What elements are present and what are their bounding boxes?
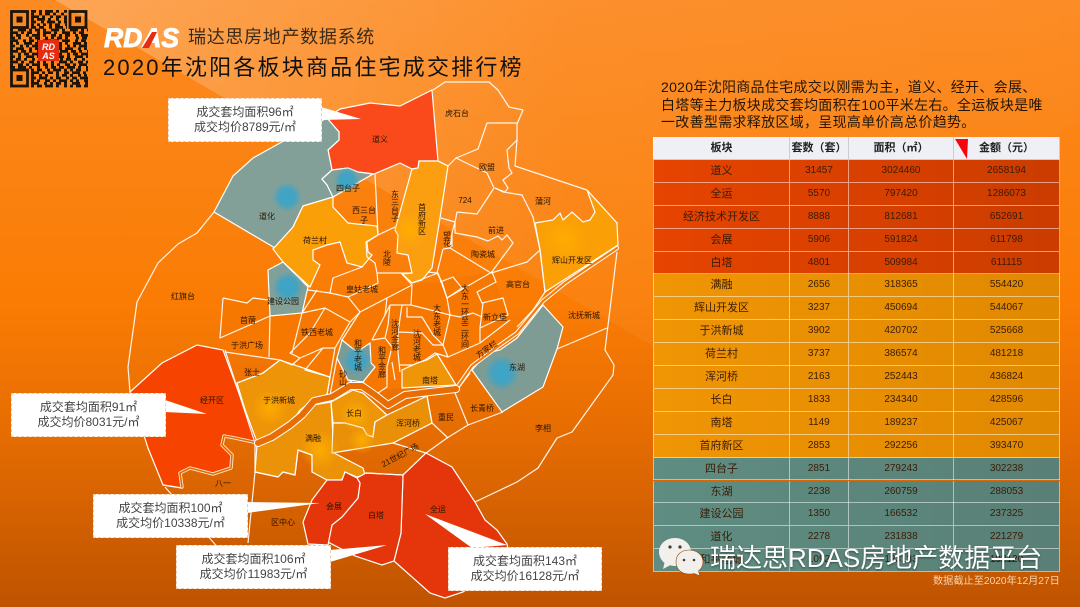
row: 满融 <box>653 274 1060 297</box>
map labels: 建设公园 <box>267 296 299 306</box>
row: 道化 <box>653 526 1060 549</box>
map labels: 南塔 <box>422 375 438 385</box>
map labels: 经开区 <box>200 395 224 405</box>
river <box>180 248 617 487</box>
map labels: 沈河金廊 <box>390 318 400 352</box>
map labels: 道义 <box>372 134 388 144</box>
row: 会展 <box>653 229 1060 252</box>
row: 满融: 满融 <box>710 279 732 291</box>
map labels: 和平金廊 <box>378 346 386 379</box>
callout: 道义 <box>168 98 322 142</box>
row: 建设公园: 166532 <box>884 508 918 519</box>
callout: 白塔: 成交均价11983元/㎡ <box>200 567 307 581</box>
row: 道义: 3024460 <box>882 165 920 176</box>
region: 长白 <box>331 390 387 437</box>
row: 和平老城: 1092 <box>808 554 830 565</box>
row: 道化: 221279 <box>990 531 1023 542</box>
map labels: 沈抚新城 <box>568 310 600 320</box>
row: 荷兰村: 荷兰村 <box>705 348 738 360</box>
map labels: 四台子 <box>336 183 360 193</box>
callout: 白塔: 成交套均面积106㎡ <box>201 552 306 566</box>
row: 于洪新城 <box>653 320 1060 343</box>
map labels: 砂山 <box>338 369 348 387</box>
intro text <box>661 79 1043 130</box>
map labels: 全运 <box>430 504 446 514</box>
map labels: 和平老城 <box>354 339 362 372</box>
sort marker triangle <box>955 139 968 159</box>
table header: 套数（套） <box>792 142 846 154</box>
region: 辉山开发区 <box>535 190 618 292</box>
callout: 全运 <box>448 547 602 591</box>
ranking table <box>653 137 1060 572</box>
subtitle: 瑞达思房地产数据系统 <box>188 27 375 47</box>
row: 东湖: 东湖 <box>710 486 732 498</box>
row: 东湖: 2238 <box>808 486 830 496</box>
row: 长白 <box>653 389 1060 412</box>
region: 首府新区 <box>395 161 448 283</box>
row: 浑河桥: 252443 <box>884 371 918 382</box>
map labels: 长青桥 <box>470 403 494 413</box>
row: 南塔: 189237 <box>884 417 918 428</box>
row: 和平老城 <box>653 549 1060 572</box>
table header: 面积（㎡） <box>874 142 928 154</box>
row: 于洪新城: 420702 <box>884 325 918 336</box>
row: 浑河桥 <box>653 366 1060 389</box>
map labels: 欧盟 <box>479 162 495 172</box>
row: 经济技术开发区: 652691 <box>990 211 1023 222</box>
row: 会展: 611798 <box>990 234 1023 245</box>
row: 东湖: 288053 <box>990 486 1023 496</box>
map labels: 长白 <box>346 408 362 418</box>
region: 会展 <box>303 472 360 545</box>
region: 建设公园 <box>268 262 308 316</box>
row: 会展: 591824 <box>884 234 918 245</box>
data date note: 数据截止至2020年12月27日 <box>933 576 1060 587</box>
map labels: 道化 <box>259 211 275 221</box>
map glows <box>252 167 587 470</box>
map labels: 西三台 <box>352 205 376 215</box>
row: 道化: 2278 <box>808 531 830 542</box>
intro text: 2020年沈阳商品住宅成交以刚需为主，道义、经开、会展、 <box>661 79 1037 95</box>
map labels: 苜蓿 <box>240 315 256 325</box>
map labels: 铁西老城 <box>301 327 333 337</box>
row: 长白: 1833 <box>808 394 830 405</box>
map labels: 望花 <box>442 230 452 248</box>
map labels <box>171 108 600 527</box>
row: 白塔: 611115 <box>991 257 1022 268</box>
callout: 经开区: 成交套均面积91㎡ <box>40 400 137 414</box>
row: 满融: 554420 <box>990 279 1023 290</box>
map labels: 方家栏 <box>474 338 499 360</box>
table header <box>653 137 1060 160</box>
row: 首府新区: 292256 <box>884 440 918 451</box>
row: 南塔: 425067 <box>990 417 1023 428</box>
map labels: 李相 <box>535 423 551 433</box>
region: 道义 <box>327 90 438 174</box>
row: 经济技术开发区 <box>653 206 1060 229</box>
row: 和平老城: 123133 <box>884 554 918 565</box>
region: 荷兰村 <box>273 197 378 287</box>
region: 白塔 <box>328 473 403 565</box>
QR code <box>10 10 88 88</box>
row: 建设公园: 237325 <box>990 508 1023 519</box>
intro text: 白塔等主力板块成交套均面积在100平米左右。全运板块是唯 <box>661 97 1043 113</box>
row: 四台子: 四台子 <box>705 463 738 475</box>
row: 白塔: 509984 <box>884 257 918 268</box>
row: 白塔 <box>653 252 1060 274</box>
map labels: 东三台子 <box>390 189 400 222</box>
callout: 经开区 <box>11 393 166 437</box>
row: 全运: 1286073 <box>987 188 1026 199</box>
row: 南塔 <box>653 412 1060 435</box>
row: 经济技术开发区: 8888 <box>808 211 830 222</box>
map labels: 白塔 <box>368 510 384 520</box>
row: 于洪新城: 于洪新城 <box>700 325 744 337</box>
intro text: 一改善型需求释放区域，呈现高单价高总价趋势。 <box>661 114 976 130</box>
row: 道义 <box>653 160 1060 183</box>
callout: 经开区: 成交均价8031元/㎡ <box>37 415 140 429</box>
QR code: RD <box>42 42 55 52</box>
map labels: 区中心 <box>271 517 295 527</box>
row: 道义: 2658194 <box>987 165 1026 176</box>
row: 满融: 2656 <box>808 279 830 290</box>
title: 2020年沈阳各板块商品住宅成交排行榜 <box>103 55 524 80</box>
map labels: 红旗台 <box>171 291 195 301</box>
map labels: 满融 <box>305 433 321 443</box>
row: 于洪新城: 3902 <box>808 325 830 336</box>
row: 满融: 318365 <box>884 279 918 290</box>
table header: 金额（元） <box>979 142 1034 154</box>
callout: 会展: 成交套均面积100㎡ <box>118 501 223 515</box>
row: 道化: 道化 <box>710 531 732 543</box>
row: 辉山开发区 <box>653 297 1060 320</box>
map labels: 蒲河 <box>535 196 551 206</box>
map labels: 于洪新城 <box>263 395 295 405</box>
row: 全运: 5570 <box>808 188 830 199</box>
map labels: 首府新区 <box>418 202 426 235</box>
region: 满融 <box>255 402 365 480</box>
region: 南塔 <box>402 354 456 388</box>
row: 建设公园: 建设公园 <box>700 508 744 520</box>
region: 经开区 <box>130 345 257 488</box>
row: 辉山开发区: 辉山开发区 <box>694 302 749 314</box>
row: 会展: 会展 <box>710 234 732 246</box>
row: 建设公园: 1350 <box>808 508 830 519</box>
row: 辉山开发区: 3237 <box>808 302 830 313</box>
row: 首府新区: 393470 <box>990 440 1023 451</box>
row: 荷兰村 <box>653 343 1060 366</box>
row: 全运 <box>653 183 1060 206</box>
region: 东湖 <box>472 305 563 412</box>
map labels: 浑河桥 <box>396 418 420 428</box>
row: 长白: 234340 <box>884 394 918 405</box>
map labels: 虎石台 <box>445 108 469 118</box>
row: 辉山开发区: 450694 <box>884 302 918 313</box>
callout: 会展 <box>93 494 248 538</box>
callout: 道义: 成交套均面积96㎡ <box>196 105 294 119</box>
icon: wechat <box>659 538 704 576</box>
table header: 板块 <box>710 142 732 154</box>
row: 首府新区 <box>653 435 1060 458</box>
map labels: 陶瓷城 <box>471 249 495 259</box>
row: 荷兰村: 3737 <box>808 348 830 359</box>
callout: 道义: 成交均价8789元/㎡ <box>194 120 296 134</box>
row: 浑河桥: 浑河桥 <box>705 371 738 383</box>
row: 长白: 428596 <box>990 394 1023 405</box>
watermark text: 瑞达思RDAS房地产数据平台 <box>710 543 1042 573</box>
map labels: 东湖 <box>509 362 525 372</box>
row: 道义: 道义 <box>710 165 732 177</box>
map labels: 子 <box>360 216 368 225</box>
row: 荷兰村: 481218 <box>990 348 1023 359</box>
region: 四台子 <box>322 168 373 197</box>
map labels: 会展 <box>326 501 342 511</box>
row: 浑河桥: 436824 <box>990 371 1023 382</box>
map boundary lines <box>128 82 617 550</box>
region: 和平老城 <box>337 340 375 382</box>
map labels: 北陵 <box>382 250 392 267</box>
region: 于洪新城 <box>237 360 330 443</box>
map labels: 荷兰村 <box>303 235 327 245</box>
row: 会展: 5906 <box>808 234 830 245</box>
row: 于洪新城: 525668 <box>990 325 1023 336</box>
callout: 会展: 成交均价10338元/㎡ <box>116 516 225 530</box>
row: 白塔: 4801 <box>808 257 830 268</box>
map labels: 724 <box>458 196 472 205</box>
row: 经济技术开发区: 经济技术开发区 <box>683 211 760 223</box>
map labels: 八一 <box>215 479 231 488</box>
row: 白塔: 白塔 <box>710 257 732 269</box>
row: 东湖: 260759 <box>884 486 918 496</box>
row: 荷兰村: 386574 <box>884 348 918 359</box>
row: 四台子: 2851 <box>808 463 830 474</box>
row: 四台子: 302238 <box>990 463 1023 474</box>
map labels: 新立堡 <box>483 312 507 322</box>
row: 建设公园 <box>653 503 1060 526</box>
row: 全运: 全运 <box>710 188 732 200</box>
map labels: 皇姑老城 <box>346 284 378 294</box>
row: 道化: 231838 <box>884 531 918 542</box>
map: central district fill <box>220 272 510 395</box>
row: 辉山开发区: 544067 <box>990 302 1023 313</box>
map labels: 张士 <box>244 367 260 377</box>
row: 和平老城: 和平老城 <box>700 554 744 566</box>
map labels: 21世纪广场 <box>380 441 420 469</box>
map labels: 辉山开发区 <box>552 255 592 265</box>
map labels: 大东一环至二环间 <box>460 283 470 349</box>
region: 全运 <box>394 453 510 598</box>
row: 东湖 <box>653 480 1060 503</box>
map labels: 高官台 <box>506 279 530 289</box>
row: 四台子: 279243 <box>884 463 918 474</box>
row: 首府新区: 首府新区 <box>700 440 744 452</box>
row: 经济技术开发区: 812681 <box>884 211 918 222</box>
map labels: 重民 <box>438 412 454 422</box>
callout: 白塔 <box>176 545 331 589</box>
callout: 全运: 成交套均面积143㎡ <box>473 554 577 568</box>
row: 首府新区: 2853 <box>808 440 830 451</box>
row: 南塔: 南塔 <box>710 417 732 429</box>
row: 四台子 <box>653 458 1060 480</box>
row: 道义: 31457 <box>805 165 833 176</box>
map labels: 前进 <box>488 225 504 235</box>
row: 浑河桥: 2163 <box>808 371 830 382</box>
row: 长白: 长白 <box>710 394 732 406</box>
map labels: 大东老城 <box>432 303 442 337</box>
QR code: AS <box>41 51 55 61</box>
map labels: 沈河老城 <box>412 328 422 362</box>
callout: 全运: 成交均价16128元/㎡ <box>471 569 579 583</box>
region: 道化 <box>214 118 339 248</box>
region: 浑河桥 <box>332 396 432 453</box>
row: 南塔: 1149 <box>808 417 830 428</box>
map labels: 于洪广场 <box>231 340 263 350</box>
row: 和平老城: 192120 <box>990 554 1023 565</box>
row: 全运: 797420 <box>884 188 918 199</box>
